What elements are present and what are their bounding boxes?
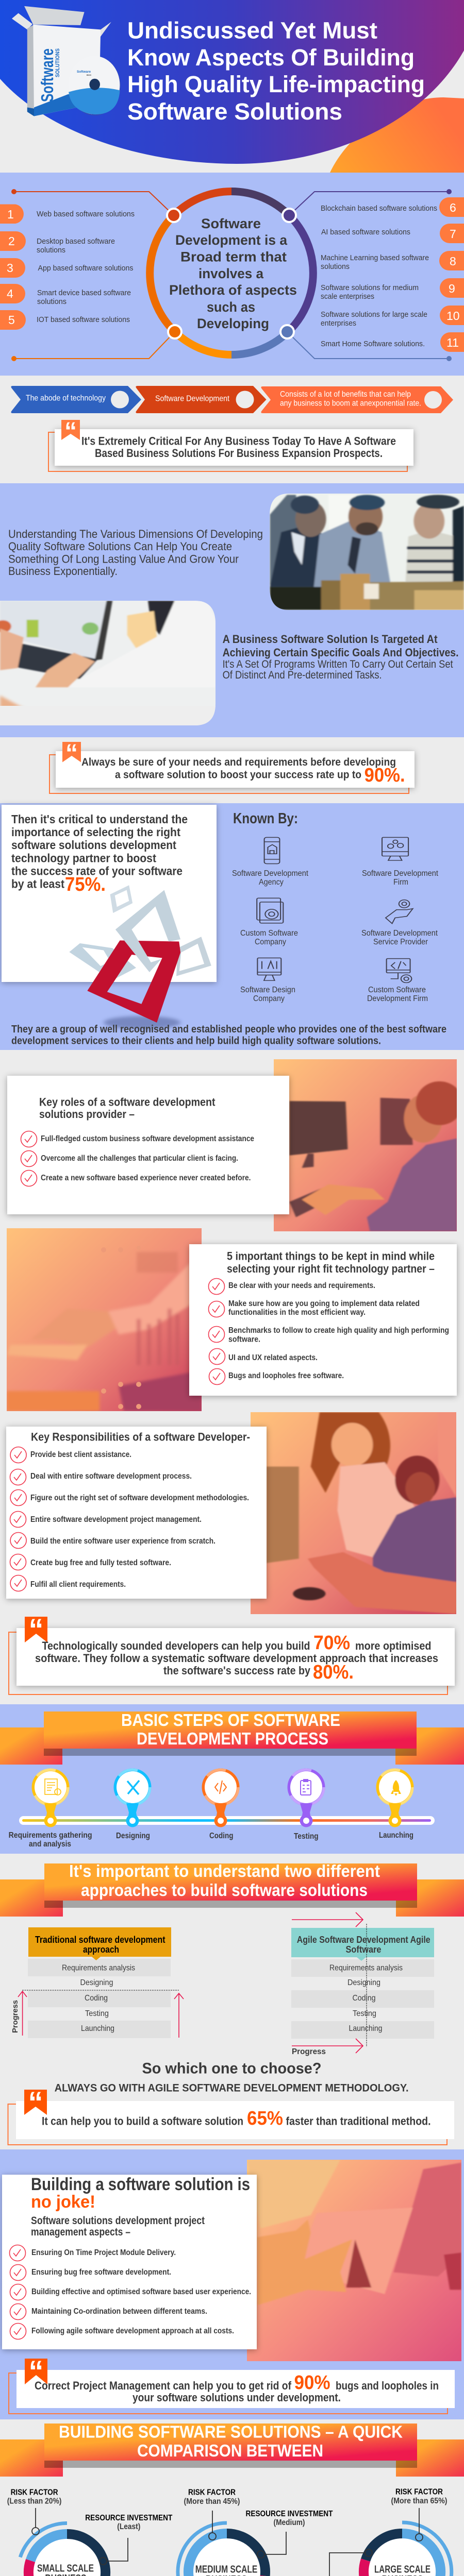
- left numbered list: 2: [8, 234, 15, 248]
- heading: known by: Known By:: [233, 810, 298, 827]
- text: understanding dimensions: Business Exponentially.: [8, 565, 118, 578]
- banner: comparison heading: COMPARISON BETWEEN: [137, 2441, 323, 2460]
- callout: correct project management: 90%: [294, 2372, 330, 2394]
- callout: technologically sounded developers: [9, 1613, 455, 1694]
- title: Undiscussed Yet Must: [127, 18, 377, 43]
- checklist: Maintaining Co-ordination between different teams.: [31, 2307, 207, 2316]
- labels: Firm: [393, 878, 408, 887]
- card: key roles: [7, 1076, 289, 1214]
- callout: correct project management: your software solutions under development.: [132, 2391, 341, 2404]
- left numbered list: Desktop based software: [37, 237, 115, 246]
- panel: known by: [0, 803, 464, 1050]
- arrow: benefits: Consists of a lot of benefits that can help: [280, 390, 411, 399]
- grid: known by items: [232, 837, 439, 1003]
- card: responsibilities: Key Responsibilities of a software Developer-: [31, 1430, 250, 1444]
- right numbered list: enterprises: [321, 319, 356, 328]
- gradient title shape: [0, 0, 464, 164]
- chart: small scale business: RISK FACTOR: [11, 2488, 58, 2497]
- card: five things: selecting your right fit technology partner –: [227, 1262, 435, 1275]
- table: agile approach: Designing: [347, 1978, 380, 1987]
- heading: which one to choose: [55, 2060, 409, 2094]
- callout: always be sure: [49, 740, 415, 793]
- banner: comparison heading: BUILDING SOFTWARE SOLUTIONS – A QUICK: [59, 2422, 403, 2441]
- chart: small scale business: (Least): [117, 2522, 140, 2531]
- callout: technologically sounded developers: “: [29, 1613, 43, 1647]
- panel: project management: [0, 2149, 464, 2419]
- right numbered list: 7: [450, 227, 456, 241]
- checklist: functionalities in the most efficient way.: [228, 1308, 366, 1317]
- card: no joke: [2, 2175, 257, 2349]
- step labels: Launching: [379, 1831, 413, 1840]
- checklist: Create a new software based experience never created before.: [41, 1174, 251, 1182]
- card: key roles: solutions provider –: [39, 1108, 135, 1121]
- panel: key roles: [7, 1059, 463, 1231]
- table: traditional approach: Requirements analysis: [62, 1964, 135, 1973]
- callout: technologically sounded developers: 70%: [313, 1632, 350, 1654]
- checklist: Build the entire software user experience from scratch.: [30, 1537, 216, 1546]
- card: no joke: Software solutions development project: [31, 2215, 205, 2227]
- chart: large scale business: (More than 65%): [391, 2497, 448, 2505]
- icon: software box and disc: Software: [77, 70, 91, 74]
- checklist: Entire software development project management.: [30, 1515, 202, 1524]
- callout: technologically sounded developers: Technologically sounded developers can help you build: [42, 1639, 310, 1652]
- heading: which one to choose: So which one to choose?: [142, 2060, 322, 2077]
- step labels: [9, 1831, 413, 1849]
- right numbered list: Blockchain based software solutions: [321, 204, 437, 213]
- table: traditional approach: Launching: [81, 2024, 114, 2033]
- center text: such as: [207, 299, 255, 315]
- checklist: Provide best client assistance.: [30, 1450, 131, 1459]
- illustration: 3D frames: [69, 885, 211, 1029]
- left numbered list: Smart device based software: [37, 289, 131, 297]
- card: no joke: management aspects –: [31, 2226, 130, 2238]
- step labels: and analysis: [29, 1840, 71, 1849]
- checklist: [10, 1447, 249, 1591]
- step labels: Coding: [209, 1832, 233, 1840]
- text: understanding dimensions: [8, 528, 263, 578]
- left numbered list: solutions: [37, 246, 65, 255]
- text: who they are: development services to their clients and help build high quality software solutions.: [11, 1036, 381, 1047]
- card: selecting partner: importance of selecting the right: [11, 825, 180, 839]
- chart: large scale business: RISK FACTOR: [395, 2488, 443, 2497]
- right numbered list: [321, 197, 464, 352]
- callout: 65% faster: faster than traditional method.: [286, 2114, 431, 2128]
- checklist: Create bug free and fully tested software.: [30, 1558, 171, 1567]
- step labels: Designing: [116, 1832, 150, 1840]
- icon: software box and disc: [12, 6, 121, 116]
- checklist: software.: [228, 1335, 260, 1344]
- banner: two approaches heading: It's important to understand two different: [69, 1861, 380, 1880]
- chart: medium scale business: [160, 2488, 333, 2576]
- right numbered list: Machine Learning based software: [321, 253, 429, 262]
- chart: medium scale business: RISK FACTOR: [188, 2488, 236, 2497]
- center text: involves a: [198, 266, 264, 281]
- callout: always be sure: 90%.: [364, 765, 405, 786]
- arrow: software development: Software Development: [155, 395, 229, 403]
- checklist: [9, 2245, 251, 2339]
- arrow: benefits: any business to boom at anexponential rate.: [280, 399, 421, 408]
- left numbered list: 1: [7, 208, 14, 221]
- table: traditional approach: Designing: [80, 1978, 113, 1987]
- callout: 65% faster: It can help you to build a software solution: [42, 2114, 243, 2128]
- left numbered list: 4: [7, 287, 13, 300]
- table: traditional approach: approach: [83, 1944, 119, 1955]
- step: coding: [202, 1768, 239, 1827]
- center text: Software: [201, 216, 261, 231]
- card: selecting partner: by at least: [11, 877, 64, 891]
- checklist: UI and UX related aspects.: [228, 1353, 318, 1362]
- checklist: Be clear with your needs and requirements.: [228, 1281, 375, 1290]
- card: five things: 5 important things to be kept in mind while: [227, 1250, 435, 1263]
- card: no joke: no joke!: [31, 2192, 95, 2212]
- right numbered list: solutions: [321, 262, 350, 271]
- text: who they are: [11, 1024, 446, 1047]
- banner: two approaches heading: approaches to build software solutions: [81, 1880, 368, 1900]
- callout: critical for any business: “: [64, 418, 77, 445]
- center text: Developing: [197, 316, 269, 331]
- step: testing: [288, 1768, 325, 1827]
- left numbered list: [0, 204, 135, 330]
- checklist: Following agile software development approach at all costs.: [31, 2327, 234, 2335]
- header hero: [0, 0, 464, 173]
- arrows: progress: [18, 1991, 184, 2038]
- text: business software solution: Of Distinct And Pre-determined Tasks.: [223, 669, 382, 681]
- chart: medium scale business: MEDIUM SCALE: [195, 2564, 257, 2575]
- card: no joke: Building a software solution is: [31, 2175, 250, 2194]
- panel: quick comparison: [0, 2422, 464, 2576]
- card: selecting partner: [2, 805, 217, 982]
- callout: always be sure: Always be sure of your needs and requirements before developing: [81, 756, 396, 768]
- labels: Software Design: [240, 986, 295, 994]
- banner: basic steps heading: DEVELOPMENT PROCESS: [137, 1729, 328, 1748]
- arrow: the abode of technology: [11, 386, 141, 413]
- checklist: Fulfil all client requirements.: [30, 1580, 126, 1589]
- checklist: Figure out the right set of software development methodologies.: [30, 1494, 249, 1502]
- labels: Company: [253, 994, 285, 1003]
- callout: correct project management: Correct Project Management can help you to get rid of: [35, 2379, 292, 2392]
- center text: Development is a: [175, 232, 288, 248]
- left numbered list: IOT based software solutions: [37, 315, 130, 324]
- panel: two approaches: [0, 1861, 464, 2145]
- photo: laptop dashboard: [0, 601, 216, 725]
- banner: basic steps heading: [0, 1710, 464, 1765]
- chart: small scale business: SMALL SCALE: [37, 2563, 94, 2574]
- checklist: Bugs and loopholes free software.: [228, 1371, 344, 1380]
- left numbered list: solutions: [37, 297, 67, 306]
- right numbered list: Smart Home Software solutions.: [321, 340, 425, 348]
- card: key roles: Key roles of a software development: [39, 1095, 216, 1109]
- labels: Custom Software: [368, 986, 426, 994]
- photo: hand and charts: [7, 1228, 202, 1411]
- panel: basic steps: [0, 1704, 464, 1854]
- title: Know Aspects Of Building: [127, 44, 415, 71]
- step labels: Testing: [294, 1832, 319, 1841]
- callout: technologically sounded developers: 80%.: [313, 1662, 354, 1683]
- callout: correct project management: “: [29, 2355, 43, 2388]
- text: understanding dimensions: Quality Software Solutions Can Help You Create: [8, 540, 232, 553]
- chart: small scale business: [4, 2488, 172, 2576]
- photo: tablet on desk: [247, 2160, 461, 2361]
- table: agile approach: Progress: [292, 2047, 326, 2056]
- text: understanding dimensions: Understanding The Various Dimensions Of Developing: [8, 528, 263, 540]
- checklist: Ensuring On Time Project Module Delivery.: [31, 2248, 176, 2257]
- checklist: Make sure how are you going to implement data related: [228, 1299, 420, 1308]
- card: selecting partner: 75%.: [65, 874, 106, 895]
- panel: five important things: [7, 1228, 457, 1411]
- labels: Development Firm: [367, 994, 428, 1003]
- table: agile approach: [291, 1912, 434, 2056]
- labels: Software Development: [361, 929, 438, 938]
- chart: small scale business: (Less than 20%): [7, 2497, 61, 2506]
- right numbered list: scale enterprises: [321, 292, 374, 301]
- banner: two approaches heading: [0, 1861, 464, 1917]
- right numbered list: 8: [450, 255, 456, 268]
- panel: understanding software solutions: [0, 483, 464, 737]
- photo: team meeting: [270, 494, 464, 610]
- checklist: Deal with entire software development process.: [30, 1472, 192, 1481]
- step: launching: [376, 1768, 413, 1827]
- table: agile approach: Software: [345, 1944, 382, 1955]
- card: selecting partner: technology partner to boost: [11, 851, 156, 865]
- photo: two women with tablet: [251, 1412, 461, 1614]
- panel: chevron arrows: [11, 386, 453, 413]
- table: traditional approach: Traditional software development: [35, 1935, 165, 1945]
- callout: critical for any business: Based Business Solutions For Business Expansion Prospects.: [95, 447, 383, 460]
- left numbered list: 3: [7, 261, 13, 275]
- step labels: Requirements gathering: [9, 1831, 92, 1840]
- table: traditional approach: Testing: [85, 2009, 109, 2018]
- card: selecting partner: Then it's critical to understand the: [11, 812, 188, 826]
- right numbered list: Software solutions for medium: [321, 283, 419, 292]
- text: business software solution: A Business Software Solution Is Targeted At: [223, 633, 438, 646]
- banner: comparison heading: [0, 2422, 464, 2477]
- table: agile approach: Coding: [353, 1994, 375, 2003]
- card: selecting partner: the success rate of your software: [11, 865, 183, 878]
- callout: 65% faster: “: [28, 2086, 43, 2120]
- card: five things: [189, 1244, 457, 1396]
- card: responsibilities: [6, 1427, 267, 1599]
- labels: Agency: [259, 878, 284, 887]
- center text: Broad term that: [180, 249, 287, 265]
- callout: 65% faster: [8, 2086, 454, 2145]
- callout: always be sure: a software solution to boost your success rate up to: [115, 769, 361, 781]
- left numbered list: Web based software solutions: [37, 210, 135, 218]
- table: agile approach: Agile Software Development Agile: [297, 1935, 430, 1945]
- table: traditional approach: [11, 1927, 184, 2038]
- text: business software solution: [223, 633, 459, 681]
- chart: large scale business: LARGE SCALE: [374, 2564, 430, 2575]
- banner: basic steps heading: BASIC STEPS OF SOFTWARE: [121, 1710, 340, 1730]
- labels: Custom Software: [240, 929, 298, 938]
- orange corner blob: [330, 97, 464, 173]
- text: understanding dimensions: Something Of Long Lasting Value And Grow Your: [8, 552, 239, 565]
- title: High Quality Life-impacting: [127, 71, 425, 97]
- chart: large scale business: [305, 2488, 452, 2576]
- table: traditional approach: Coding: [85, 1994, 108, 2003]
- icon: software box and disc: Software: [38, 48, 57, 102]
- chart: small scale business: RESOURCE INVESTMENT: [85, 2514, 172, 2522]
- right numbered list: 6: [450, 201, 456, 214]
- center text: Plethora of aspects: [169, 282, 297, 298]
- title: [127, 18, 425, 125]
- step: requirements: [32, 1768, 69, 1827]
- checklist: [208, 1279, 449, 1385]
- callout: 65% faster: 65%: [247, 2108, 283, 2129]
- callout: critical for any business: [48, 418, 413, 471]
- right numbered list: 9: [449, 282, 455, 295]
- labels: Company: [255, 938, 286, 946]
- icon: software box and disc: BOX: [87, 74, 91, 76]
- arrows: progress: [292, 1912, 363, 2053]
- callout: critical for any business: It's Extremely Critical For Any Business Today To Have A Software: [81, 435, 396, 447]
- left numbered list: App based software solutions: [38, 264, 133, 273]
- icons: [257, 837, 413, 982]
- table: agile approach: Launching: [349, 2024, 383, 2033]
- heading: which one to choose: ALWAYS GO WITH AGILE SOFTWARE DEVELOPMENT METHODOLOGY.: [55, 2082, 409, 2094]
- table: agile approach: Testing: [353, 2009, 376, 2018]
- callout: technologically sounded developers: the software's success rate by: [163, 1664, 311, 1677]
- callout: correct project management: bugs and loopholes in: [336, 2379, 439, 2392]
- labels: Software Development: [232, 869, 309, 878]
- chart: medium scale business: RESOURCE INVESTMENT: [245, 2510, 333, 2518]
- checklist: Ensuring bug free software development.: [31, 2268, 171, 2277]
- checklist: Full-fledged custom business software development assistance: [41, 1134, 254, 1143]
- right numbered list: 10: [446, 309, 460, 323]
- card: selecting partner: software solutions development: [11, 838, 176, 852]
- center text: [169, 216, 297, 331]
- arrow: the abode of technology: The abode of technology: [26, 394, 106, 403]
- arrow: software development: [136, 386, 267, 413]
- callout: correct project management: [9, 2355, 455, 2414]
- table: agile approach: Requirements analysis: [329, 1964, 403, 1973]
- timeline: [19, 1768, 435, 1827]
- callout: technologically sounded developers: more optimised: [355, 1639, 431, 1652]
- callout: always be sure: “: [65, 740, 78, 767]
- checklist: Building effective and optimised software based user experience.: [31, 2287, 251, 2296]
- panel: types of software solutions: [0, 173, 464, 376]
- right numbered list: AI based software solutions: [321, 228, 410, 236]
- left numbered list: 5: [8, 313, 15, 327]
- step: designing: [113, 1768, 152, 1827]
- table: traditional approach: Progress: [11, 2000, 20, 2033]
- ring diagram: [11, 189, 452, 361]
- icon: software box and disc: SOLUTIONS: [55, 48, 61, 77]
- labels: [232, 869, 439, 1003]
- labels: Software Development: [362, 869, 439, 878]
- checklist: [21, 1131, 254, 1186]
- chart: medium scale business: (More than 45%): [184, 2497, 240, 2506]
- labels: Service Provider: [373, 938, 428, 946]
- right numbered list: Software solutions for large scale: [321, 310, 427, 319]
- checklist: Overcome all the challenges that particular client is facing.: [41, 1154, 238, 1163]
- title: Software Solutions: [127, 98, 342, 125]
- chart: medium scale business: (Medium): [273, 2518, 305, 2527]
- photo: developer at desk: [274, 1059, 463, 1231]
- arrow: benefits: [261, 386, 453, 413]
- right numbered list: 11: [446, 336, 459, 349]
- panel: key responsibilities: [6, 1412, 461, 1614]
